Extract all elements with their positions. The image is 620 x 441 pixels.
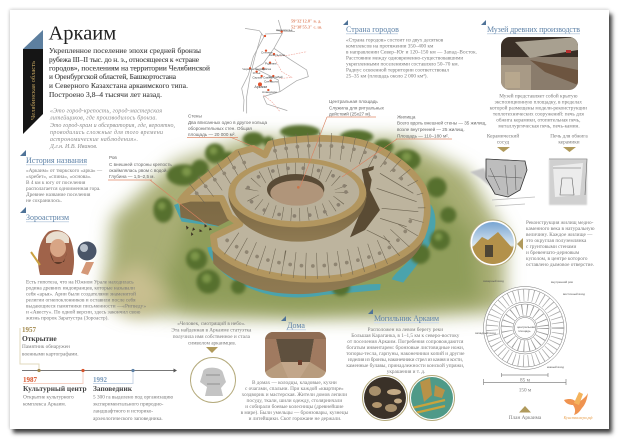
text: Реконструкция жилищ медно-: [526, 220, 594, 226]
text: в мире). Были умельцы — бронзовары, кузнецы: [241, 409, 349, 416]
quote by Ivanov: проводились сложные для того времени: [50, 129, 163, 136]
map of the Country of Towns: Куйсак: [262, 67, 272, 71]
kiln sketch: керамики: [558, 140, 580, 146]
text: выдающиеся памятники письменности —«Ригведу»: [26, 304, 146, 310]
text: и бревенчато-дерновым: [526, 249, 580, 256]
dark passage: [350, 166, 380, 237]
heading: История названия: [26, 156, 87, 165]
plan drawing: [484, 286, 566, 370]
outer wall top with roofs: [181, 138, 427, 279]
intro paragraph: и Оренбургской областей, Башкортостана: [49, 72, 177, 81]
section: history of the name: [20, 150, 103, 204]
text: Музей представляет собой крытую: [499, 92, 578, 100]
text: величину. Каждое жилище —: [526, 232, 593, 238]
event 1957: 1957: [22, 326, 36, 334]
text: оставлено дымовое отверстие.: [526, 262, 594, 268]
text: «Страна городов» состоит из двух десятков: [346, 38, 444, 44]
pointer: [517, 238, 523, 250]
rivers and borders: [242, 20, 308, 113]
label: central square: [327, 99, 385, 117]
text: топоры-тесла, гарпуны, наконечники копий и другие: [346, 350, 465, 357]
quote: получила имя собственное и стала: [173, 333, 251, 340]
text: с грунтовыми стенами: [526, 244, 577, 250]
quote by Ivanov: литейщиков, где производилось бронза.: [49, 114, 157, 122]
citadel top: [228, 158, 366, 227]
text: Расположен на левом берегу реки: [368, 326, 443, 333]
heading: Страна городов: [346, 25, 399, 34]
title: Аркаим: [48, 22, 116, 44]
label: moat: Ров: [109, 155, 117, 160]
tree highlights: [158, 147, 442, 287]
label: dwellings: возле внутренней — 25 жилищ.: [397, 126, 465, 132]
label: central square: действий (25х27 м).: [329, 110, 371, 116]
section: Zoroastrianism: [20, 207, 147, 322]
event 1992: 1992: [93, 376, 108, 384]
event 1992: Заповедник: [93, 384, 133, 393]
text: экспозиционную площадку, в пределах: [495, 100, 582, 106]
event 1987: 1987: [23, 376, 38, 384]
towns: [249, 30, 283, 91]
text: располагается одноименная гора.: [26, 186, 100, 192]
text: изделия из бронзы, наконечники стрел из камня и кости,: [348, 356, 463, 363]
event 1992: 5 300 га выделено под организацию: [93, 394, 173, 400]
text: которой размещены модели-реконструкции: [490, 104, 587, 112]
caption: План Аркаима: [509, 415, 542, 421]
section: Country of Towns: [343, 20, 478, 80]
text: украшения и т. д.: [387, 369, 425, 375]
main illustration: Arkaim fortress: [105, 117, 505, 318]
label: walls: Два вписанных одно в другое кольца: [188, 120, 268, 125]
plan labels: северный вход: [483, 279, 504, 283]
plan labels: [475, 279, 585, 369]
map of the Country of Towns: Синташта: [264, 80, 278, 84]
text: Древнее название поселения: [26, 192, 91, 198]
plan labels: западный вход: [475, 331, 496, 335]
label: walls: Стены: [188, 114, 202, 118]
statuette icon: [190, 358, 236, 402]
event 1992: ландшафтного и историко-: [93, 408, 153, 414]
intro paragraph: городов», поселениям на территории Челябинской: [49, 64, 210, 72]
plan of Arkaim: [475, 279, 585, 421]
heading: Могильник Аркаим: [374, 314, 439, 323]
map of the Country of Towns: Сарым-Саклы: [252, 75, 272, 79]
label: moat: С внешней стороны крепость: [109, 161, 172, 167]
intro paragraph: Построено 3,8–4 тысячи лет назад.: [49, 90, 162, 99]
logo: [563, 392, 593, 420]
map of the Country of Towns: Родники: [265, 62, 277, 66]
intro paragraph: и Северного Казахстана аркаимского типа.: [49, 81, 188, 90]
reconstruction dwelling callout: [470, 220, 596, 268]
people in gateway: [187, 225, 211, 235]
dimension lines: [484, 373, 566, 385]
event 1987: Культурный центр: [23, 384, 87, 393]
text: каменного века в натуральную: [526, 226, 595, 232]
plan labels: площадь: [518, 329, 531, 333]
text: жизнь пророк Заратустра (Зороастр).: [25, 314, 109, 322]
plan of Arkaim: 150 м: [519, 388, 532, 394]
heading: Зороастризм: [26, 213, 69, 222]
section: Houses: [241, 316, 349, 422]
ceramic vessel sketch: [470, 132, 535, 206]
text: «Аркаим» от тюркского «арка» —: [26, 168, 103, 174]
plan of Arkaim: 85 м: [520, 378, 531, 384]
label: dwellings: Жилища: [397, 114, 416, 120]
text: обжига керамики, отопительная печь,: [496, 116, 580, 124]
logo: Кунсткамера.рф: [563, 415, 593, 420]
kiln sketch: Печь для обжига: [550, 132, 588, 140]
event 1987: [23, 369, 87, 408]
event 1957: Открытие: [22, 334, 57, 343]
quote: символом аркаимцев.: [188, 340, 236, 346]
text: Расстояние между одновременно-существовавшими: [346, 56, 463, 62]
portrait of Zoroaster: [31, 230, 96, 275]
gold artifacts photo: [410, 376, 454, 420]
outer wall face: [179, 163, 429, 294]
label: dwellings: [396, 114, 487, 139]
coordinates: 52°38'55.3" с. ш.: [291, 24, 322, 30]
text: «хребет», «спина», «основа».: [26, 173, 91, 180]
text: Есть гипотеза, что на Южном Урале находилась: [26, 280, 134, 286]
text: религии огнепоклонников и оставили после себя: [26, 296, 136, 304]
wall leader lines: [150, 117, 397, 225]
text: богатым инвентарем: бронзовые листовидные ножи,: [346, 344, 464, 351]
quote: «Человек, смотрящий в небо».: [177, 320, 246, 327]
central plaza: [267, 174, 324, 205]
label: walls: [187, 114, 268, 138]
text: В домах — колодцы, кладовые, кухни: [252, 380, 337, 386]
text: Радиус освоенной территории соответствовал: [346, 66, 449, 74]
text: каменные булавы, принадлежности конской упряжи,: [346, 362, 464, 369]
plan labels: восточный вход: [563, 292, 585, 296]
map of the Country of Towns: Кизильское: [269, 53, 286, 57]
event 1992: археологического заповедника.: [93, 416, 163, 422]
timeline: [20, 326, 177, 422]
statuette block: [171, 320, 253, 402]
text: и литейщики. Скот горожане не держали.: [249, 415, 341, 422]
quote: Эта найденная в Аркаиме статуэтка: [171, 326, 252, 334]
map of the Country of Towns: Степное: [261, 50, 273, 54]
label: walls: площадь — 20 000 м².: [188, 132, 236, 137]
map of the Country of Towns: Аландское: [262, 90, 277, 94]
citadel wall face: [228, 193, 367, 242]
text: посуду, ткали, шили одежду, столярничали: [247, 398, 342, 404]
citadel partitions: [252, 169, 342, 215]
label: moat: окаймлялась рвом с водой.: [109, 167, 168, 173]
text: себя «арья». Арии были создателями знаменитой: [26, 290, 136, 298]
map of the Country of Towns: Черноречье: [276, 28, 293, 32]
map of the Country of Towns: Устье: [253, 71, 261, 75]
pointer: [519, 406, 531, 412]
text: куполом, в центре которого: [526, 256, 588, 262]
label: dwellings: Площадь — 110–180 м².: [397, 134, 449, 138]
pointer: [206, 347, 218, 353]
text: родина древних индоиранцев, которые называли: [26, 286, 135, 292]
text: от поселения Аркаим. Погребения сопровождаются: [347, 338, 464, 345]
heading: [481, 20, 580, 34]
plan labels: южный вход: [547, 365, 564, 369]
heading: Дома: [287, 321, 305, 330]
ceramic vessel sketch: Керамический: [487, 132, 519, 140]
plan labels: центральная: [517, 325, 535, 329]
intro paragraph: Укрепленное поселение эпохи средней бронзы: [49, 46, 201, 55]
label: walls: оборонительных стен. Общая: [188, 126, 252, 131]
text: и «Авесту». По одной версии, здесь закончил свою: [26, 308, 140, 316]
label: dwellings: Всего вдоль внешней стены — 35 жилищ,: [397, 120, 487, 126]
text: металлургическая печь, печь-камин.: [498, 124, 580, 130]
text: теплотехнических сооружений: печь для: [493, 110, 584, 118]
text: не сохранилось.: [26, 198, 62, 204]
map of the Country of Towns: [242, 18, 322, 113]
text: 25–35 км (площадь около 2 000 км²).: [346, 72, 428, 80]
label: central square: Центральная площадь: [329, 99, 378, 104]
region ribbon: [23, 30, 43, 134]
event 1987: комплекса Аркаим.: [23, 402, 66, 408]
museum photo: [501, 37, 578, 90]
map of the Country of Towns: Журумбай: [268, 75, 283, 79]
water moat: [174, 202, 435, 297]
text: комплексов на протяжении 350–400 км: [346, 44, 434, 50]
text: это округлая полуземлянка: [526, 238, 587, 244]
event 1957: военными картографами.: [22, 350, 79, 358]
section: Museum of ancient crafts: [470, 20, 588, 206]
map of the Country of Towns: Аркаим: [254, 85, 268, 89]
trees: [153, 125, 456, 296]
event 1957: Памятник обнаружен: [22, 343, 70, 350]
event 1987: Открытие культурного: [23, 394, 74, 400]
section: Arkaim burial ground: [346, 309, 466, 420]
text: укрепленными поселениями составляло 50–70 км.: [346, 62, 459, 68]
axis with arrow: [22, 368, 177, 372]
map of the Country of Towns: Чернореченское: [242, 67, 266, 71]
label: moat: Глубина — 1,5–2,5 м.: [109, 174, 155, 179]
dwelling photo: [470, 220, 516, 266]
quote by Ivanov: Это город-храм и обсерватория, где, вероятно,: [50, 122, 176, 129]
text: с очагами, спальни. При каждой «квартире»: [245, 385, 344, 392]
ground: [105, 138, 505, 318]
intro paragraph: рубежа III–II тыс. до н. э., относящееся к «стране: [49, 55, 200, 64]
region ribbon: Челябинская область: [30, 61, 37, 120]
stone artifacts photo: [362, 376, 408, 420]
outer ring partitions: [197, 146, 412, 266]
quote by Ivanov: «Это город-крепость, город-мастерская: [50, 108, 162, 114]
event 1992: [93, 369, 173, 422]
coordinates: 59°32'12.8" в. д.: [291, 18, 321, 24]
ceramic vessel sketch: сосуд: [497, 140, 509, 146]
quote by Ivanov: Д.г.н. И.В. Иванов.: [49, 144, 98, 150]
event 1957: [20, 326, 79, 372]
house photo: [265, 332, 326, 378]
heading: Музей древних производств: [487, 25, 580, 34]
text: в направлении Север–Юг и 120–150 км — Запад–Восток.: [346, 50, 477, 56]
text: В 4 км к югу от поселения: [26, 180, 86, 186]
text: Большая Караганка, в 1–1,5 км к северо-востоку: [351, 333, 460, 339]
quote by Ivanov: астрономические наблюдения».: [50, 136, 138, 143]
text: хоздворик и мастерская. Жители домов лепили: [242, 392, 347, 398]
text: и собирали боевые колесницы (древнейшие: [245, 403, 344, 410]
kiln sketch: [549, 132, 588, 205]
label: central square: Служила для ритуальных: [329, 106, 385, 110]
label: moat: [108, 155, 172, 180]
plan labels: внутренний ров: [551, 280, 573, 284]
event 1992: экспериментального природно-: [93, 402, 164, 408]
